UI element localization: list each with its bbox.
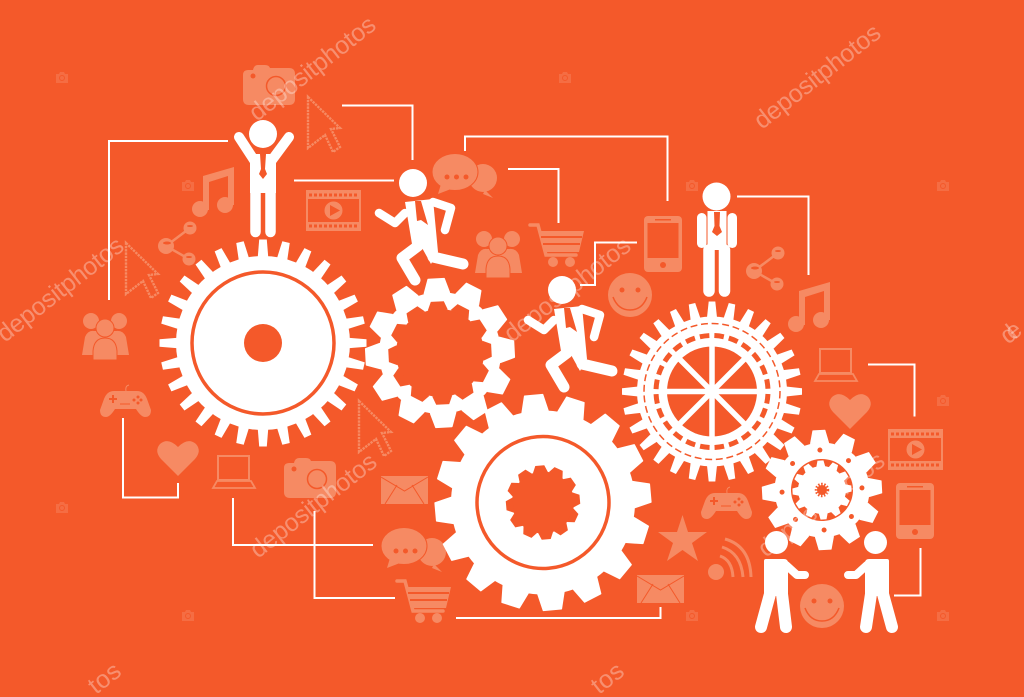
person: right figure holding gear 5 (848, 531, 892, 627)
icons layer (82, 65, 942, 628)
icon: heart right (829, 394, 871, 429)
watermarks: depositphotos (243, 10, 381, 127)
icon: film top (307, 191, 360, 230)
icon: camera top (243, 65, 295, 105)
icon: cursor center (359, 401, 391, 456)
icon: laptop left (213, 456, 255, 488)
icon: film right (889, 430, 942, 469)
watermarks: depositphotos (748, 18, 886, 135)
icon: heart left (157, 441, 199, 476)
watermarks: depositphotos (498, 231, 636, 348)
gear 5: small gear (759, 427, 885, 553)
icon: mail center (381, 476, 428, 504)
icon: camera bottom (284, 458, 336, 498)
icon: phone top (644, 216, 682, 272)
person: left figure holding gear 5 (761, 531, 805, 627)
gear 1: large fine-toothed gear (160, 240, 366, 446)
connector lines (109, 106, 920, 618)
icon: phone right (896, 483, 934, 539)
icon: mail bottom (637, 575, 684, 603)
icon: people top (475, 231, 522, 278)
faint background camera marks (56, 72, 949, 621)
gear 2: open gear (362, 275, 518, 431)
icon: star (658, 515, 707, 561)
icon: people left (82, 313, 129, 360)
icon: wifi (708, 539, 751, 580)
watermarks: depositphotos (752, 446, 890, 563)
icon: gamepad right (701, 487, 752, 519)
icon: cart top (530, 225, 584, 267)
icon: laptop right (815, 349, 857, 381)
icon: music note left (192, 167, 234, 217)
person: standing on gear 4 (697, 182, 737, 291)
watermarks: depositphotos (244, 447, 382, 564)
person: running on gear 3 (528, 276, 612, 387)
icon: smile top (608, 273, 652, 317)
icon: smile bottom (800, 584, 844, 628)
icon: cursor left (126, 243, 158, 298)
icon: music note right (788, 282, 830, 332)
icon: chat bottom (381, 528, 446, 572)
icon: cart bottom (397, 581, 451, 623)
person: arms raised on gear 1 (239, 120, 289, 232)
person: running on gear 2 (379, 169, 463, 280)
icon: chat top (432, 154, 497, 198)
icon: share left (158, 222, 196, 266)
gear 3: large bottom gear (427, 386, 659, 619)
icon: gamepad left (100, 385, 151, 417)
gear 4: spoked wheel gear (622, 302, 802, 482)
icon: share right (746, 246, 784, 290)
icon: cursor top (308, 97, 340, 152)
